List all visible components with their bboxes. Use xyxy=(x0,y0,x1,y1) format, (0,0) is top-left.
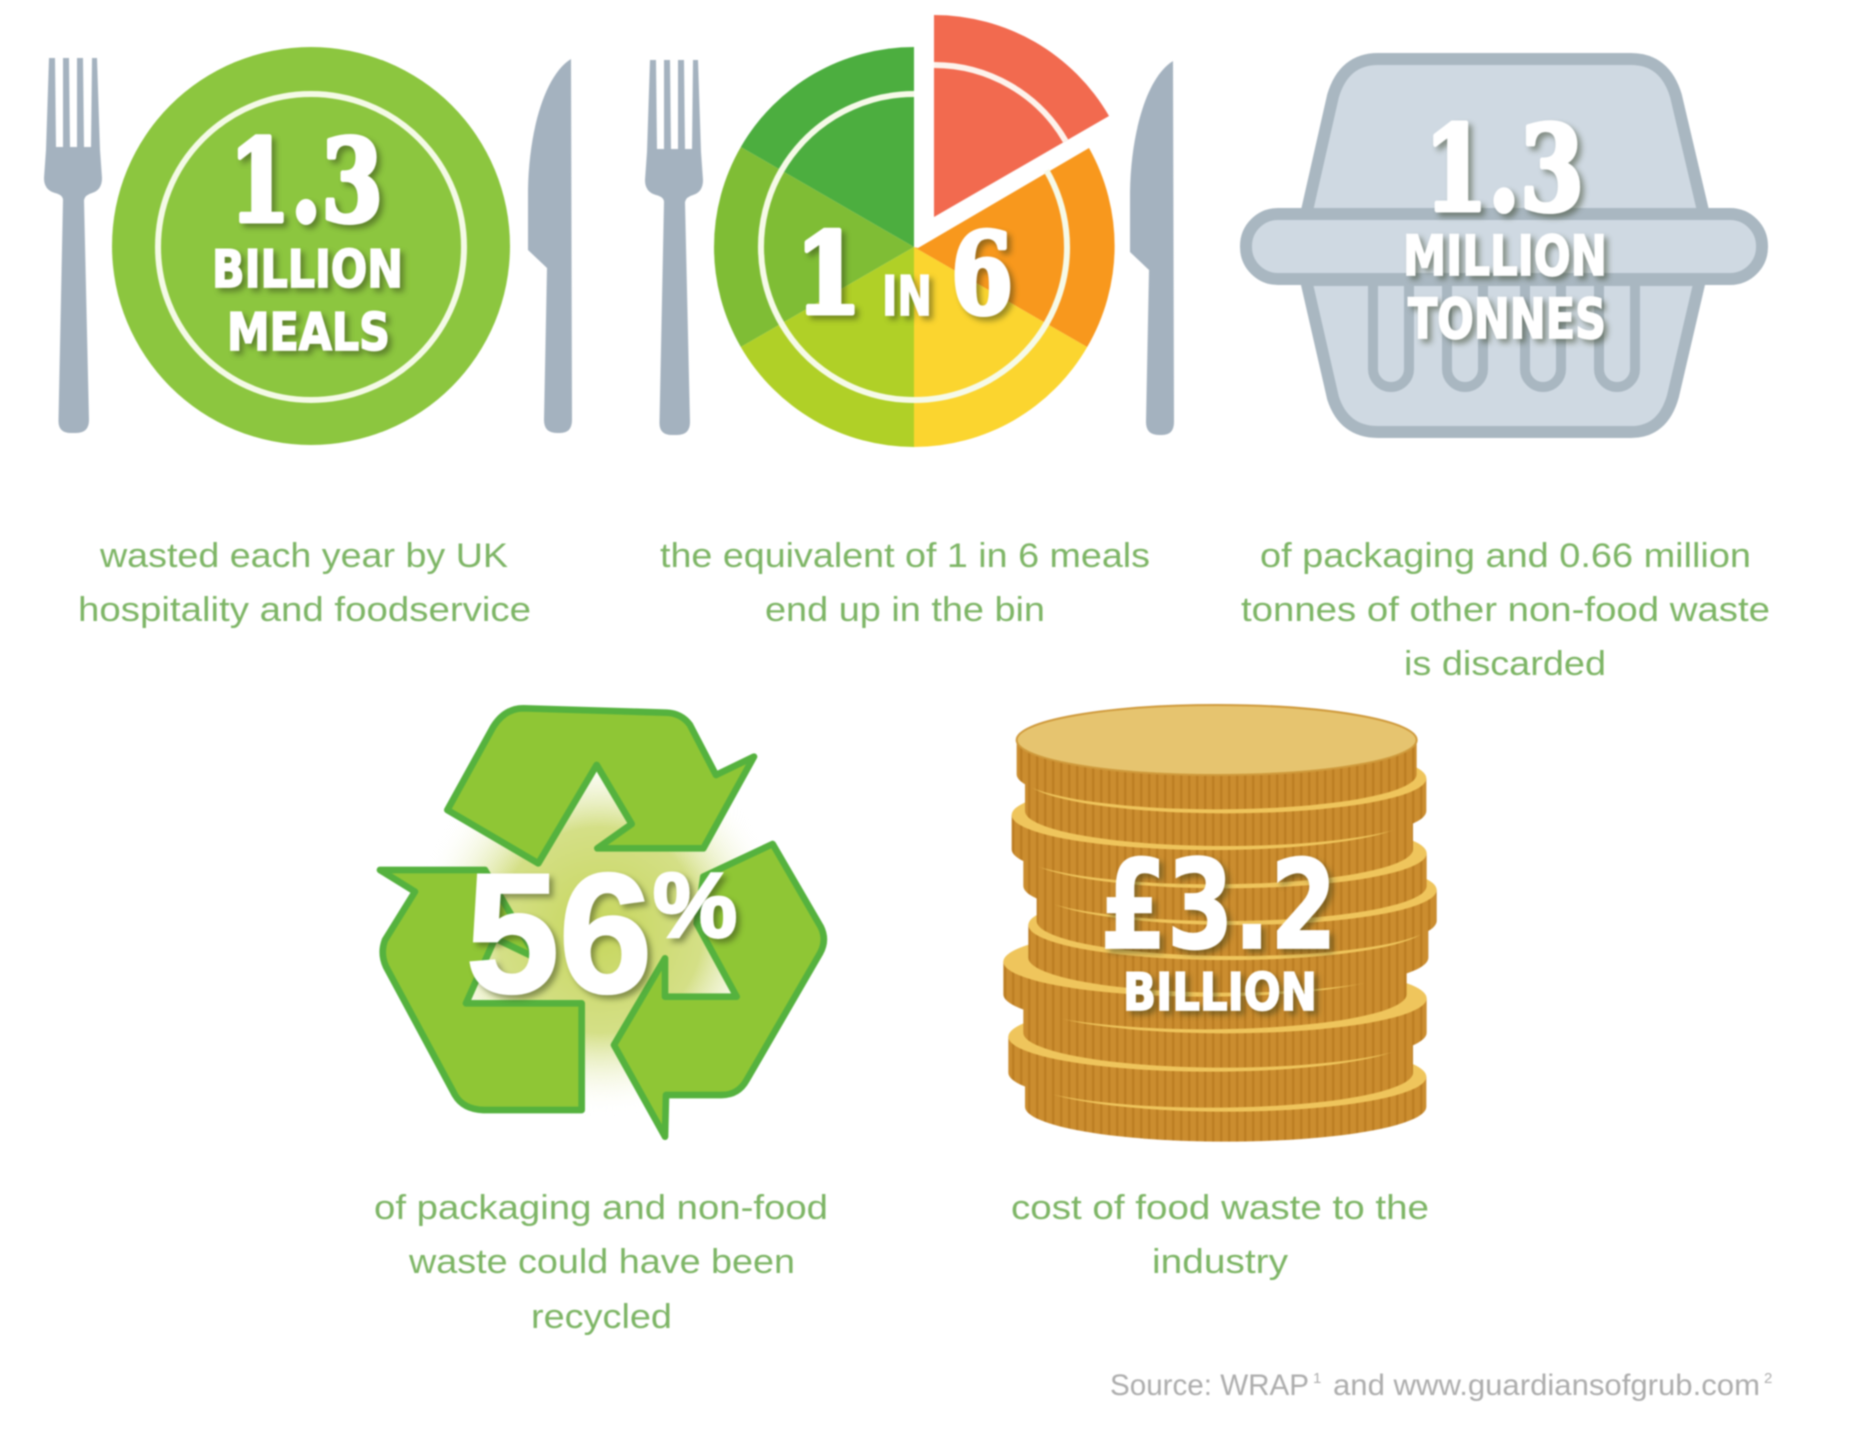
caption: equivalent of 1 in 6: end up in the bin xyxy=(765,591,1045,629)
stat: 1 in 6: IN xyxy=(882,265,932,328)
icon: segmented plate xyxy=(714,47,1115,447)
source note: Source: WRAP xyxy=(1110,1369,1309,1402)
caption: could have been recycled xyxy=(374,1189,828,1336)
stat: 1.3 billion meals: MEALS xyxy=(227,303,390,363)
caption: could have been recycled: of packaging and non-food xyxy=(374,1189,828,1227)
stat: 1 in 6: 6 xyxy=(951,210,1013,340)
caption: cost of food waste: industry xyxy=(1152,1243,1288,1281)
caption: packaging discarded: of packaging and 0.66 million xyxy=(1260,537,1751,575)
icon: stack of coins xyxy=(1003,705,1437,1142)
stat: 1 in 6 xyxy=(795,210,1013,340)
stat: 3.2 billion pounds xyxy=(1100,835,1337,1023)
panel: 1.3 million tonnes xyxy=(1241,59,1770,683)
stat: 56%: 56 xyxy=(466,839,652,1029)
icon: green plate xyxy=(112,47,510,445)
stat: 1.3 billion meals: 1.3 xyxy=(229,115,383,248)
source note xyxy=(1110,1369,1772,1402)
caption: cost of food waste: cost of food waste to the xyxy=(1011,1189,1429,1227)
stat: 1.3 million tonnes xyxy=(1403,100,1607,351)
stat: 56%: % xyxy=(653,855,737,957)
stat: 1.3 billion meals: BILLION xyxy=(212,240,403,300)
stat: 1 in 6: 1 xyxy=(795,210,862,340)
icon: takeaway box xyxy=(1246,59,1762,432)
icon: fork xyxy=(44,58,102,433)
stat: 1.3 million tonnes: TONNES xyxy=(1408,287,1606,351)
caption: equivalent of 1 in 6 xyxy=(660,537,1150,629)
caption: packaging discarded: is discarded xyxy=(1404,645,1606,683)
caption: equivalent of 1 in 6: the equivalent of 1 in 6 meals xyxy=(660,537,1150,575)
panel: 56% recyclable xyxy=(374,708,828,1336)
stat: 3.2 billion pounds: £3.2 xyxy=(1100,835,1337,978)
caption: packaging discarded: tonnes of other non-food waste xyxy=(1241,591,1770,629)
caption: wasted each year: wasted each year by UK xyxy=(99,537,508,575)
stat: 3.2 billion pounds: BILLION xyxy=(1123,963,1317,1023)
icon: recycling arrows xyxy=(380,708,824,1137)
caption: could have been recycled: waste could have been xyxy=(408,1243,795,1281)
caption: cost of food waste xyxy=(1011,1189,1429,1281)
caption: wasted each year xyxy=(78,537,531,629)
caption: could have been recycled: recycled xyxy=(531,1298,672,1336)
icon: knife xyxy=(528,59,572,433)
icon: removed red slice xyxy=(934,15,1109,217)
caption: packaging discarded xyxy=(1241,537,1770,683)
panel: 1.3 billion meals xyxy=(44,47,572,629)
stat: 56% xyxy=(466,839,737,1029)
stat: 1.3 million tonnes: MILLION xyxy=(1403,224,1607,288)
icon: fork xyxy=(645,60,703,435)
stat: 1.3 million tonnes: 1.3 xyxy=(1424,100,1584,238)
source note: 1 xyxy=(1313,1370,1321,1387)
caption: wasted each year: hospitality and foodservice xyxy=(78,591,531,629)
source note: 2 xyxy=(1764,1370,1772,1387)
source note: and www.guardiansofgrub.com xyxy=(1333,1369,1760,1402)
panel: 1 in 6 meals xyxy=(645,15,1174,629)
stat: 1.3 billion meals xyxy=(212,115,403,363)
panel: 3.2 billion pounds xyxy=(1003,705,1437,1281)
icon: knife xyxy=(1130,61,1174,435)
